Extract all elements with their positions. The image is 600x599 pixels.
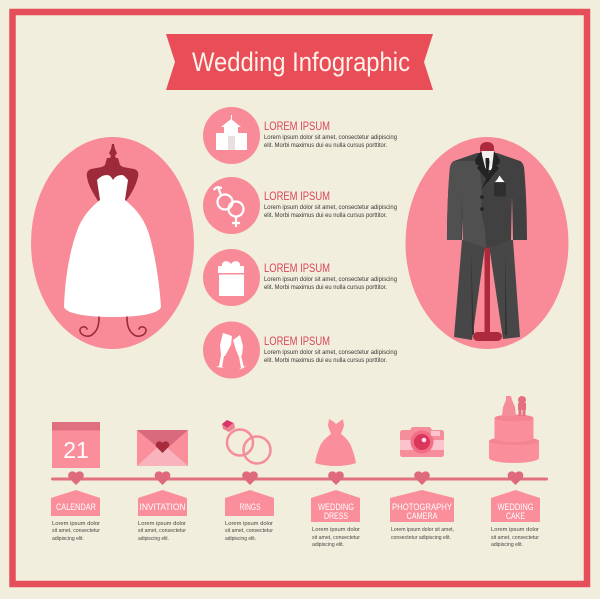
description: sit amet, consectetur xyxy=(225,528,273,534)
description: Lorem ipsum dolor xyxy=(225,521,273,527)
jacket lighter panel xyxy=(447,161,486,248)
body text xyxy=(264,205,397,219)
info row 3 xyxy=(203,249,397,306)
info row 1 xyxy=(203,107,397,164)
icon: camera xyxy=(400,427,444,457)
title banner xyxy=(166,34,433,90)
lapels xyxy=(475,151,500,190)
description: adipiscing elit. xyxy=(138,536,169,542)
body text xyxy=(264,277,397,291)
jacket pocket and square xyxy=(494,176,506,196)
info row 2 xyxy=(203,177,397,234)
icon: gender rings xyxy=(214,187,244,227)
heading: LOREM IPSUM xyxy=(264,121,330,133)
body text: elit. Morbi maximus dui eu nulla cursus porttitor. xyxy=(264,213,387,219)
description xyxy=(312,527,360,548)
label xyxy=(311,490,360,522)
body text xyxy=(264,350,397,364)
description: Lorem ipsum dolor xyxy=(138,521,186,527)
description xyxy=(491,527,539,548)
icon: calendar: 21 xyxy=(63,437,89,463)
step: photography camera xyxy=(390,427,454,541)
description: adipiscing elit. xyxy=(52,536,84,542)
mannequin stand xyxy=(473,142,502,341)
body text: Lorem ipsum dolor sit amet, consectetur adipiscing xyxy=(264,205,397,211)
heading: LOREM IPSUM xyxy=(264,263,330,275)
body text: Lorem ipsum dolor sit amet, consectetur adipiscing xyxy=(264,350,397,356)
description: sit amet, consectetur xyxy=(52,528,100,534)
step: rings xyxy=(222,420,274,542)
description: Lorem ipsum dolor xyxy=(491,527,539,533)
label: CAKE xyxy=(506,511,525,522)
trousers xyxy=(454,240,520,340)
step: calendar xyxy=(51,422,100,542)
description: consectetur adipiscing elit. xyxy=(391,535,451,541)
description: sit amet, consectetur xyxy=(138,528,186,534)
label: RINGS xyxy=(240,502,260,513)
body text: Lorem ipsum dolor sit amet, consectetur adipiscing xyxy=(264,277,397,283)
mannequin xyxy=(87,144,138,201)
label: CAMERA xyxy=(406,511,438,522)
body text xyxy=(264,135,397,149)
icon: rings xyxy=(222,420,270,464)
label: DRESS xyxy=(324,511,348,522)
icon: gift xyxy=(218,261,244,296)
heading: LOREM IPSUM xyxy=(264,336,330,348)
label: WEDDING xyxy=(498,502,534,513)
timeline hearts xyxy=(68,471,523,485)
description: Lorem ipsum dolor xyxy=(52,521,100,527)
body text: elit. Morbi maximus dui eu nulla cursus porttitor. xyxy=(264,285,387,291)
description xyxy=(52,521,100,542)
icon: cake xyxy=(489,396,539,463)
label: INVITATION xyxy=(140,502,186,513)
label xyxy=(491,490,540,522)
dress stand legs xyxy=(80,317,146,336)
title: Wedding Infographic xyxy=(192,47,410,77)
icon: dress xyxy=(315,419,356,466)
description: sit amet, consectetur xyxy=(491,535,539,541)
icon: champagne glasses xyxy=(216,333,247,370)
label xyxy=(390,490,454,522)
icon: envelope xyxy=(137,430,188,466)
description: Lorem ipsum dolor sit amet, xyxy=(391,527,454,533)
shirt and tie xyxy=(482,151,494,170)
panel: groom suit xyxy=(406,137,568,349)
timeline line xyxy=(51,478,548,480)
description: Lorem ipsum dolor xyxy=(312,527,360,533)
step: wedding dress xyxy=(311,419,360,548)
panel: wedding dress xyxy=(31,137,194,349)
dress xyxy=(64,175,161,317)
description xyxy=(138,521,186,542)
description xyxy=(391,527,454,541)
buttons xyxy=(480,195,484,211)
jacket xyxy=(447,153,527,248)
icon: church xyxy=(216,115,247,150)
description: adipiscing elit. xyxy=(312,542,344,548)
description: adipiscing elit. xyxy=(491,542,523,548)
step: invitation xyxy=(137,430,188,542)
body text: elit. Morbi maximus dui eu nulla cursus porttitor. xyxy=(264,143,387,149)
body text: Lorem ipsum dolor sit amet, consectetur adipiscing xyxy=(264,135,397,141)
label: PHOTOGRAPHY xyxy=(392,502,453,513)
description xyxy=(225,521,273,542)
description: sit amet, consectetur xyxy=(312,535,360,541)
info row 4 xyxy=(203,322,397,378)
label: WEDDING xyxy=(318,502,354,513)
heading: LOREM IPSUM xyxy=(264,191,330,203)
label: CALENDAR xyxy=(56,502,96,513)
body text: elit. Morbi maximus dui eu nulla cursus porttitor. xyxy=(264,358,387,364)
step: wedding cake xyxy=(489,396,540,548)
description: adipiscing elit. xyxy=(225,536,256,542)
